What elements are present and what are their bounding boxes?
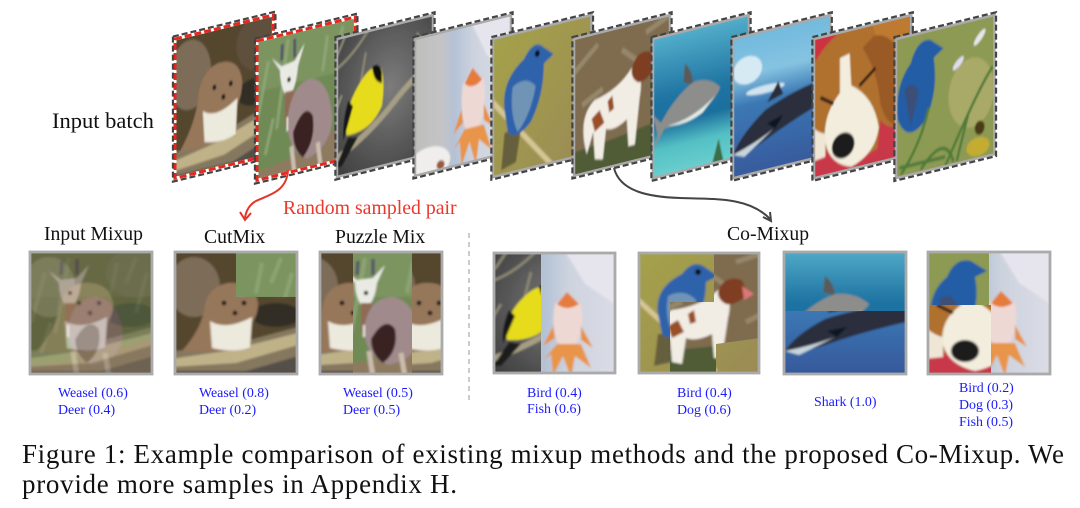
panel: co-mixup bird and dog [638, 252, 760, 374]
title: Puzzle Mix: Puzzle Mix [335, 226, 425, 248]
labels: co-mixup 1: Fish (0.6) [527, 402, 581, 417]
labels: co-mixup 3: Shark (1.0) [814, 395, 877, 410]
panel: co-mixup bird, dog and fish [926, 250, 1052, 376]
panel: input mixup image [28, 250, 154, 376]
arrow: gray to Co-Mixup [614, 168, 771, 221]
labels: input mixup [58, 386, 128, 418]
title: Input Mixup: Input Mixup [44, 223, 143, 245]
labels: co-mixup 2: Bird (0.4) [677, 386, 732, 401]
divider [468, 233, 470, 404]
labels: co-mixup 4 [959, 381, 1014, 430]
card: goldfish [409, 7, 516, 184]
labels: co-mixup 4: Bird (0.2) [959, 381, 1014, 396]
labels: co-mixup 4: Dog (0.3) [959, 398, 1013, 413]
card: standing dog [569, 7, 675, 184]
labels: co-mixup 1 [527, 386, 582, 417]
card: deer (red sampled) [252, 9, 360, 188]
labels: cutmix [199, 386, 269, 418]
panel: co-mixup bird and fish [492, 252, 616, 374]
card: weasel (red sampled) [172, 10, 277, 183]
input batch label: Input batch [52, 108, 154, 133]
arrow: red random pair [240, 170, 288, 220]
card: goldfinch [332, 7, 438, 185]
labels: puzzle mix: Weasel (0.5) [343, 386, 413, 401]
labels: co-mixup 2: Dog (0.6) [677, 403, 731, 418]
caption: Figure 1: Example comparison of existing mixup methods and the proposed Co-Mixup. We [22, 439, 1064, 469]
panel: co-mixup shark [782, 250, 908, 376]
panel: cutmix image [174, 250, 298, 376]
card: bunting on plant [891, 7, 999, 186]
card: sleeping beagle [809, 7, 916, 186]
labels: co-mixup 1: Bird (0.4) [527, 386, 582, 401]
labels: puzzle mix [343, 386, 413, 418]
labels: cutmix: Deer (0.2) [199, 403, 256, 418]
labels: co-mixup 2 [677, 386, 732, 418]
card: shark near reef [648, 7, 754, 186]
caption [22, 439, 1064, 499]
panel: puzzle mix image [318, 250, 444, 376]
title: Co-Mixup: Co-Mixup [727, 223, 809, 245]
labels: co-mixup 4: Fish (0.5) [959, 415, 1013, 430]
labels: input mixup: Weasel (0.6) [58, 386, 128, 401]
labels: input mixup: Deer (0.4) [58, 403, 115, 418]
label: random sampled pair: Random sampled pair [283, 197, 457, 219]
caption: provide more samples in Appendix H. [22, 469, 457, 499]
labels: cutmix: Weasel (0.8) [199, 386, 269, 401]
card: shark in deep water [728, 7, 835, 186]
labels: puzzle mix: Deer (0.5) [343, 403, 400, 418]
card: indigo bunting [488, 7, 596, 185]
title: CutMix: CutMix [204, 226, 265, 248]
